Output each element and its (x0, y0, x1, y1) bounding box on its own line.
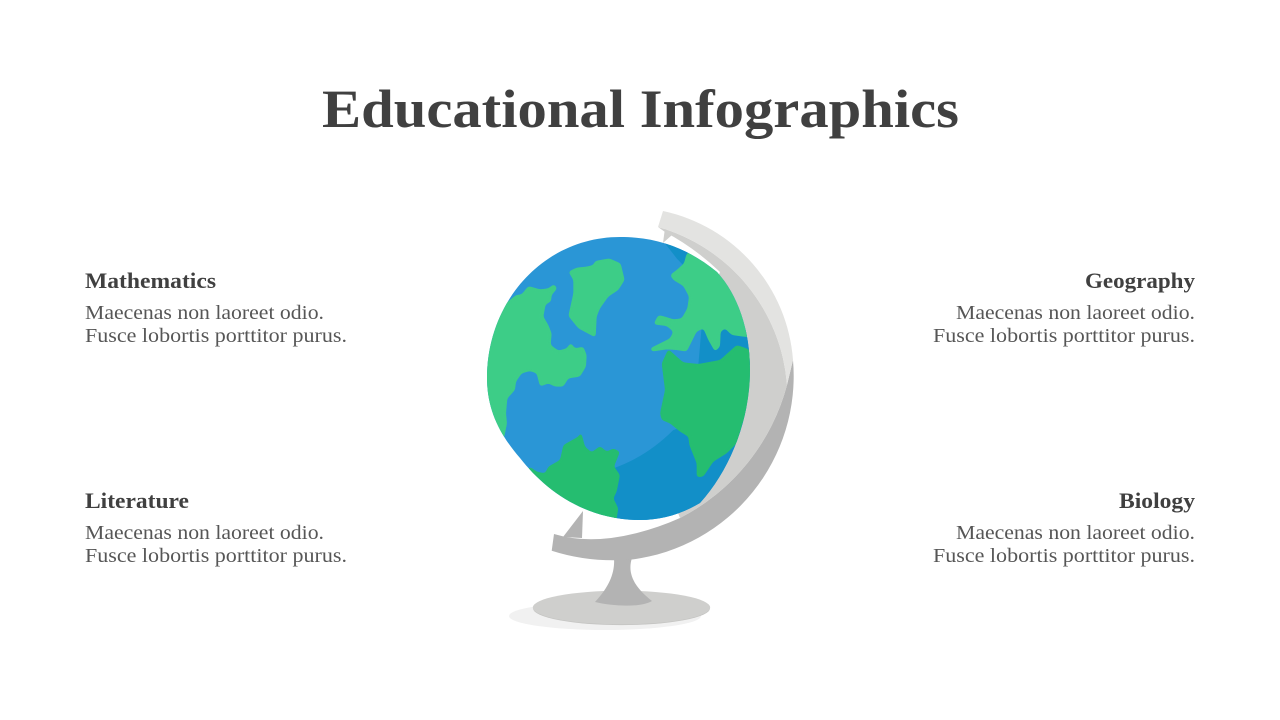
text block: Mathematics: Fusce lobortis porttitor purus. (85, 325, 347, 347)
text block: Literature: Fusce lobortis porttitor purus. (85, 545, 347, 567)
text block: Geography: Maecenas non laoreet odio. (956, 302, 1195, 324)
base shadow (509, 602, 701, 630)
text block: Mathematics (85, 268, 347, 347)
text block: Literature: Literature (85, 488, 189, 513)
text block: Biology: Maecenas non laoreet odio. (956, 522, 1195, 544)
lower pivot peg (563, 511, 583, 538)
stand arm: shadow side (552, 360, 794, 560)
title: Educational Infographics (322, 79, 959, 139)
text block: Geography (933, 268, 1195, 347)
text block: Biology (933, 488, 1195, 567)
continent: north (568, 258, 625, 338)
stand neck (595, 558, 652, 606)
text block: Literature (85, 488, 347, 567)
continent: west (487, 285, 586, 436)
ocean shade top (665, 244, 689, 264)
text block: Literature: Maecenas non laoreet odio. (85, 522, 324, 544)
continent: south (528, 434, 620, 518)
stand base (533, 591, 710, 625)
stand arm: middle band (650, 227, 787, 518)
text block: Geography: Fusce lobortis porttitor purus. (933, 325, 1195, 347)
ocean shade south (614, 408, 746, 520)
stand arm: highlight band (658, 211, 793, 385)
continent: north-east (651, 253, 747, 352)
text block: Mathematics: Mathematics (85, 268, 216, 293)
upper pivot peg (663, 228, 672, 243)
globe illustration (470, 211, 794, 630)
continent: east (660, 346, 750, 477)
text block: Biology: Fusce lobortis porttitor purus. (933, 545, 1195, 567)
text block: Geography: Geography (1085, 268, 1195, 293)
ocean shade right (698, 330, 750, 365)
text block: Biology: Biology (1119, 488, 1195, 513)
text block: Mathematics: Maecenas non laoreet odio. (85, 302, 324, 324)
globe sphere (487, 237, 750, 520)
ocean (480, 230, 760, 525)
